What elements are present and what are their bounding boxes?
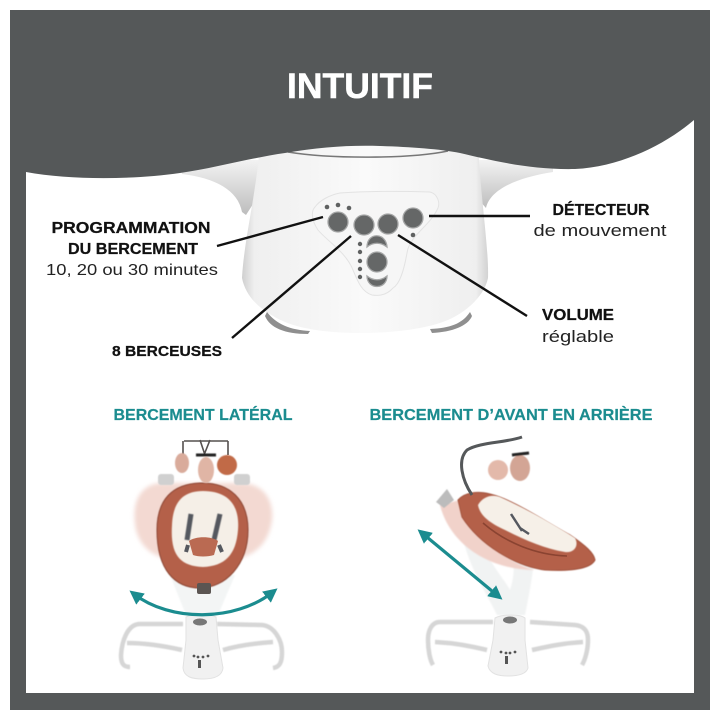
heading: bercement latéral: BERCEMENT LATÉRAL — [114, 407, 292, 424]
ghost clip — [436, 489, 454, 508]
base body — [488, 615, 528, 676]
base buttons — [193, 655, 209, 668]
heading: bercement d'avant en arrière: BERCEMENT D’AVANT EN ARRIÈRE — [370, 407, 652, 424]
callout: programmation du bercement: 10, 20 ou 30 minutes — [46, 262, 218, 279]
harness — [511, 514, 529, 534]
callout: détecteur: de mouvement — [534, 221, 667, 240]
callout: 8 berceuses: 8 BERCEUSES — [112, 344, 222, 360]
seat cushion — [478, 496, 577, 552]
base dial — [503, 616, 517, 624]
control plate — [312, 191, 439, 295]
ghost clips — [158, 474, 174, 485]
callout: détecteur: DÉTECTEUR — [552, 202, 650, 219]
stand — [462, 535, 535, 615]
illustration: swing, side to side — [121, 440, 282, 679]
lid rim — [288, 151, 448, 157]
ghost stand — [170, 575, 235, 615]
base frame — [428, 622, 588, 665]
mobile arm — [462, 437, 522, 495]
callout line: programmation — [217, 217, 323, 246]
control buttons — [328, 208, 423, 286]
callout: détecteur — [534, 202, 667, 240]
callout line: 8 berceuses — [232, 236, 351, 338]
diagonal arrow — [422, 533, 498, 596]
buckle — [197, 583, 211, 594]
ghost seat — [134, 483, 272, 560]
seat — [458, 492, 595, 570]
white content panel — [26, 110, 694, 693]
callout: programmation du bercement — [46, 220, 218, 279]
callout: volume: réglable — [542, 327, 614, 346]
callout: volume: VOLUME — [542, 307, 614, 324]
base dial — [193, 618, 207, 626]
callout line: volume — [398, 235, 527, 316]
handles — [180, 160, 262, 215]
product: control unit close-up — [180, 145, 553, 334]
indicator lights — [325, 203, 415, 279]
illustration: swing, front to back — [422, 437, 595, 676]
base buttons — [500, 651, 516, 664]
seat cushion — [172, 491, 238, 567]
toys — [175, 453, 237, 483]
callout: programmation du bercement: PROGRAMMATION — [52, 220, 210, 237]
grey wave header — [26, 110, 694, 178]
ghost seat — [440, 500, 535, 570]
feet — [265, 312, 310, 334]
body shell — [242, 145, 488, 333]
seat — [157, 483, 248, 588]
callout: programmation du bercement: DU BERCEMENT — [68, 241, 199, 258]
base frame — [121, 624, 282, 668]
title: INTUITIF — [287, 67, 433, 106]
harness — [187, 514, 220, 540]
side arrow — [134, 592, 273, 615]
callout line: détecteur — [429, 215, 530, 217]
callout: volume — [542, 307, 614, 346]
seat rim — [483, 523, 567, 556]
toys — [488, 453, 530, 481]
base body — [183, 615, 223, 679]
mobile — [183, 440, 228, 455]
